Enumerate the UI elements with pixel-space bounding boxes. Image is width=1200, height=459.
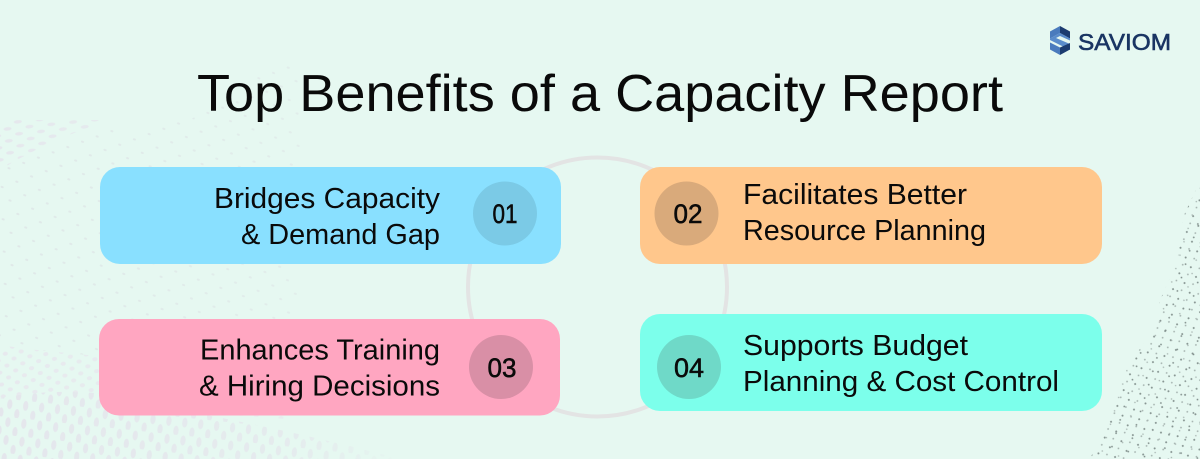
background pattern: left halftone wave: [0, 66, 340, 459]
card 03: Enhances Training & Hiring Decisions: [99, 319, 560, 416]
icon: Saviom hexagonal S: [1050, 26, 1070, 55]
card 04 text: Planning & Cost Control: [743, 366, 1059, 398]
card 03 number badge: [469, 335, 533, 399]
logo wordmark: SAVIOM: [1078, 29, 1171, 55]
logo: Saviom: [1050, 26, 1171, 55]
card 03 text: Enhances Training: [200, 334, 440, 366]
card 04 text: Supports Budget: [743, 330, 968, 362]
card 02 number badge: [654, 182, 718, 246]
card 02 number badge: 02: [674, 199, 702, 229]
card 03 text: & Hiring Decisions: [199, 370, 440, 402]
card 02: Facilitates Better Resource Planning: [640, 167, 1102, 264]
card 02 text: Resource Planning: [743, 215, 986, 247]
card 03 number badge: 03: [488, 353, 516, 383]
card 01 text: & Demand Gap: [241, 219, 440, 251]
card 01 number badge: 01: [492, 199, 518, 229]
connecting ring: [468, 158, 727, 416]
card 04: Supports Budget Planning & Cost Control: [640, 314, 1102, 411]
background pattern: right dot field: [1092, 188, 1200, 459]
card 04 number badge: 04: [674, 353, 704, 383]
card 02 text: Facilitates Better: [743, 179, 968, 211]
card 01 text: Bridges Capacity: [214, 183, 441, 215]
card 04 number badge: [657, 335, 721, 399]
card 01 number badge: [473, 182, 537, 246]
card 01: Bridges Capacity & Demand Gap: [100, 167, 561, 264]
title: Top Benefits of a Capacity Report: [197, 65, 1004, 123]
